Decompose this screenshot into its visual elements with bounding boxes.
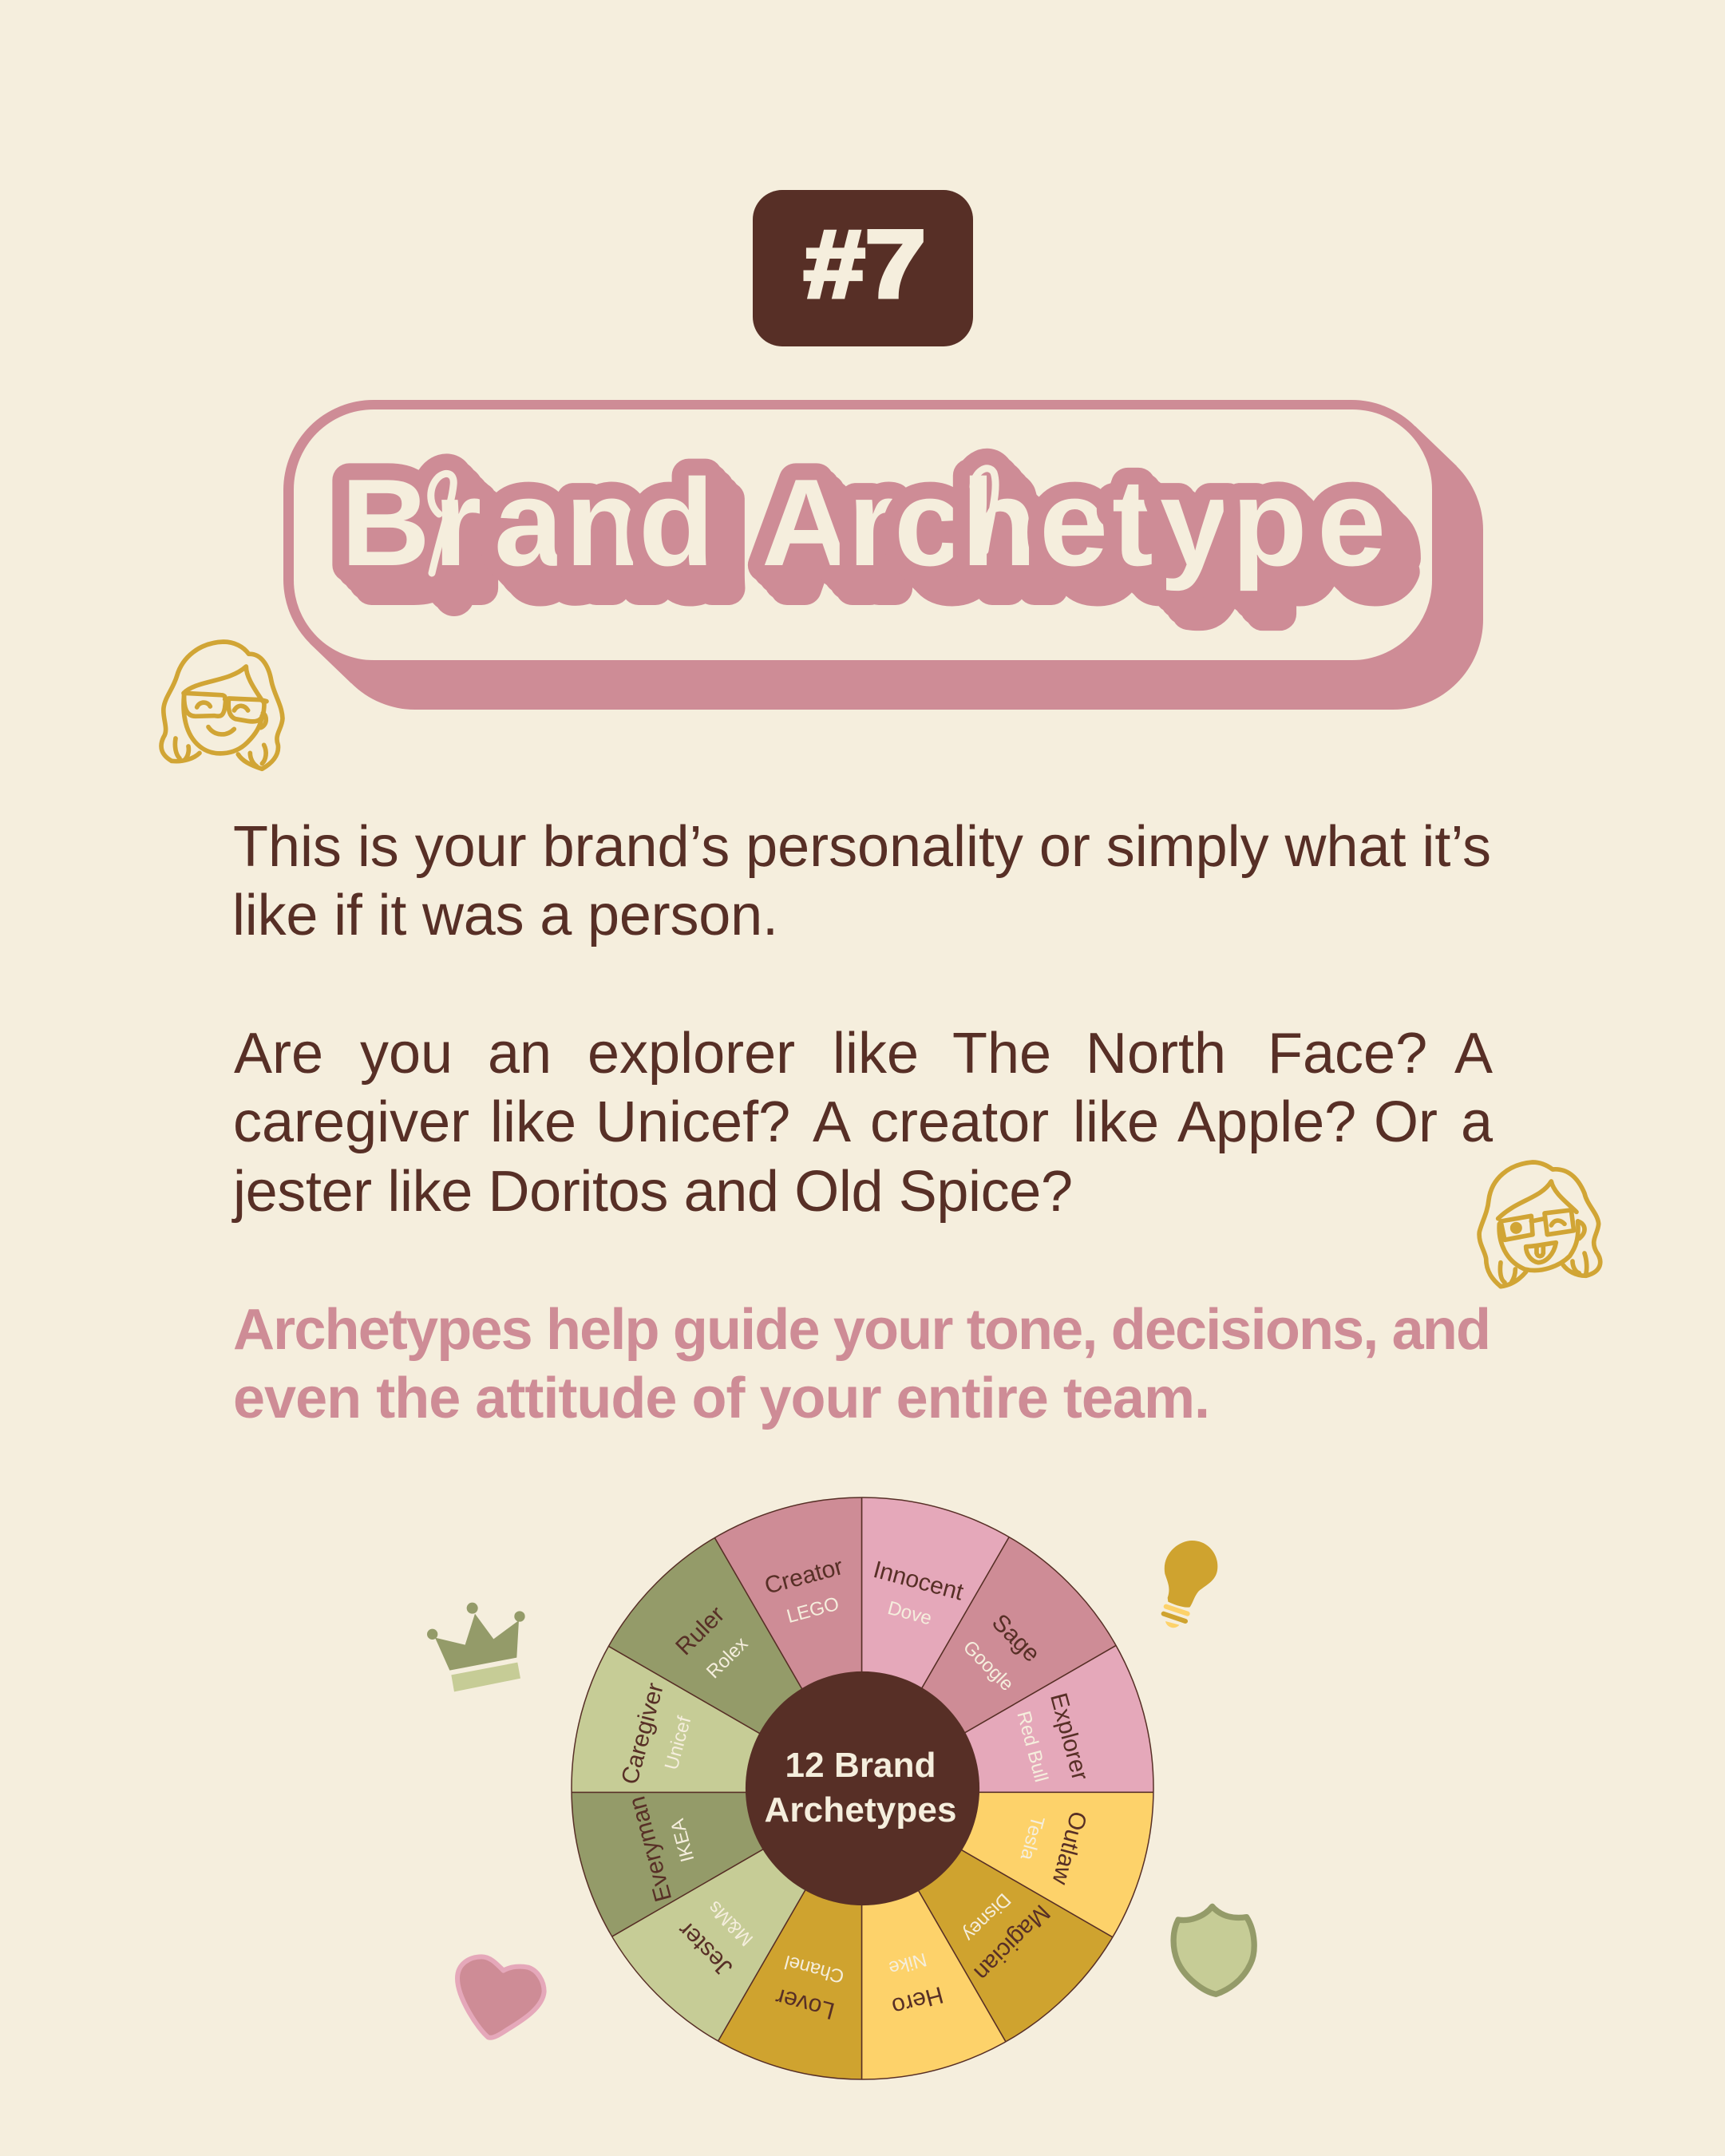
wheel slices — [572, 1497, 1153, 2079]
text block: intro paragraph — [232, 815, 1491, 947]
text block: intro paragraph: This is your brand’s personality or simply what it’s — [233, 815, 1491, 879]
icon: crown — [427, 1603, 525, 1691]
brand labels: Google — [959, 1636, 1018, 1695]
brand labels: Red Bull — [1012, 1709, 1052, 1784]
archetype labels: Sage — [987, 1609, 1045, 1667]
text block: intro paragraph: like if it was a person. — [232, 884, 778, 947]
text block: pink highlighted statement: even the attitude of your entire team. — [233, 1367, 1210, 1430]
archetype labels — [616, 1553, 1094, 2024]
brand labels: IKEA — [667, 1817, 698, 1864]
archetype labels: Lover — [773, 1983, 837, 2024]
wheel hub — [746, 1671, 979, 1905]
title letter swashes — [431, 469, 995, 573]
text block: question paragraph: you — [360, 1022, 453, 1086]
text block: question paragraph: Are — [234, 1022, 323, 1086]
text block: question paragraph: an — [488, 1022, 552, 1086]
brand labels: LEGO — [785, 1593, 841, 1628]
text block: question paragraph: The — [952, 1022, 1051, 1086]
brand labels: Chanel — [782, 1951, 846, 1988]
archetype labels: Hero — [889, 1981, 946, 2020]
text block: question paragraph: like — [833, 1022, 919, 1086]
archetype labels: Ruler — [671, 1601, 730, 1660]
text block: question paragraph: creator — [870, 1090, 1049, 1154]
brand labels: M&Ms — [704, 1897, 758, 1950]
hub title: 12 Brand — [785, 1746, 936, 1785]
text block: question paragraph: Unicef? — [595, 1090, 790, 1154]
text block: question paragraph: like — [490, 1090, 576, 1154]
brand labels: Rolex — [702, 1633, 752, 1683]
badge: #7: #7 — [804, 211, 926, 318]
text block: question paragraph: like — [1073, 1090, 1159, 1154]
title: Brand Archetype: Brand Archetype — [341, 453, 1386, 591]
text block: pink highlighted statement: Archetypes help guide your tone, decisions, and — [233, 1298, 1491, 1362]
text block: question paragraph: jester like Doritos and Old Spice? — [231, 1160, 1073, 1224]
wheel outline — [572, 1497, 1153, 2079]
hub title: Archetypes — [765, 1790, 956, 1830]
text block: question paragraph: Apple? — [1177, 1090, 1356, 1154]
icon: light bulb — [1164, 1541, 1217, 1628]
archetype labels: Explorer — [1045, 1691, 1094, 1783]
brand labels: Dove — [885, 1597, 934, 1629]
text block: question paragraph: A — [813, 1090, 851, 1154]
brand labels — [661, 1593, 1052, 1988]
icon: winking woman with tongue out — [1479, 1162, 1600, 1287]
text block: question paragraph: Face? — [1268, 1022, 1427, 1086]
archetype labels: Caregiver — [616, 1680, 669, 1787]
badge: #7 — [753, 190, 973, 346]
archetype labels: Outlaw — [1046, 1809, 1091, 1888]
hub title — [765, 1746, 956, 1830]
banner inner panel — [294, 409, 1432, 660]
brand labels: Tesla — [1016, 1814, 1048, 1863]
title banner — [283, 400, 1483, 710]
banner extruded shadow — [283, 400, 1483, 710]
archetype labels: Creator — [762, 1553, 846, 1600]
archetype labels: Jester — [673, 1917, 738, 1981]
text block: question paragraph: A — [1454, 1022, 1493, 1086]
brand labels: Nike — [886, 1948, 929, 1979]
archetype labels: Everyman — [623, 1794, 677, 1905]
brand labels: Unicef — [661, 1714, 695, 1772]
text block: question paragraph: caregiver — [233, 1090, 469, 1154]
archetype labels: Innocent — [871, 1557, 967, 1606]
icon: smiling woman with glasses — [161, 642, 283, 769]
text block: question paragraph: North — [1086, 1022, 1226, 1086]
text block: question paragraph: a — [1461, 1090, 1494, 1154]
archetype labels: Magician — [968, 1899, 1055, 1986]
text block: pink highlighted statement — [233, 1298, 1491, 1430]
icon: shield — [1173, 1906, 1254, 1994]
brand labels: Disney — [958, 1889, 1015, 1945]
text block: question paragraph: Or — [1374, 1090, 1438, 1154]
text block: question paragraph — [231, 1022, 1494, 1224]
text block: question paragraph: explorer — [588, 1022, 795, 1086]
icon: heart — [457, 1956, 544, 2038]
chart: 12 brand archetypes wheel — [571, 1497, 1154, 2080]
